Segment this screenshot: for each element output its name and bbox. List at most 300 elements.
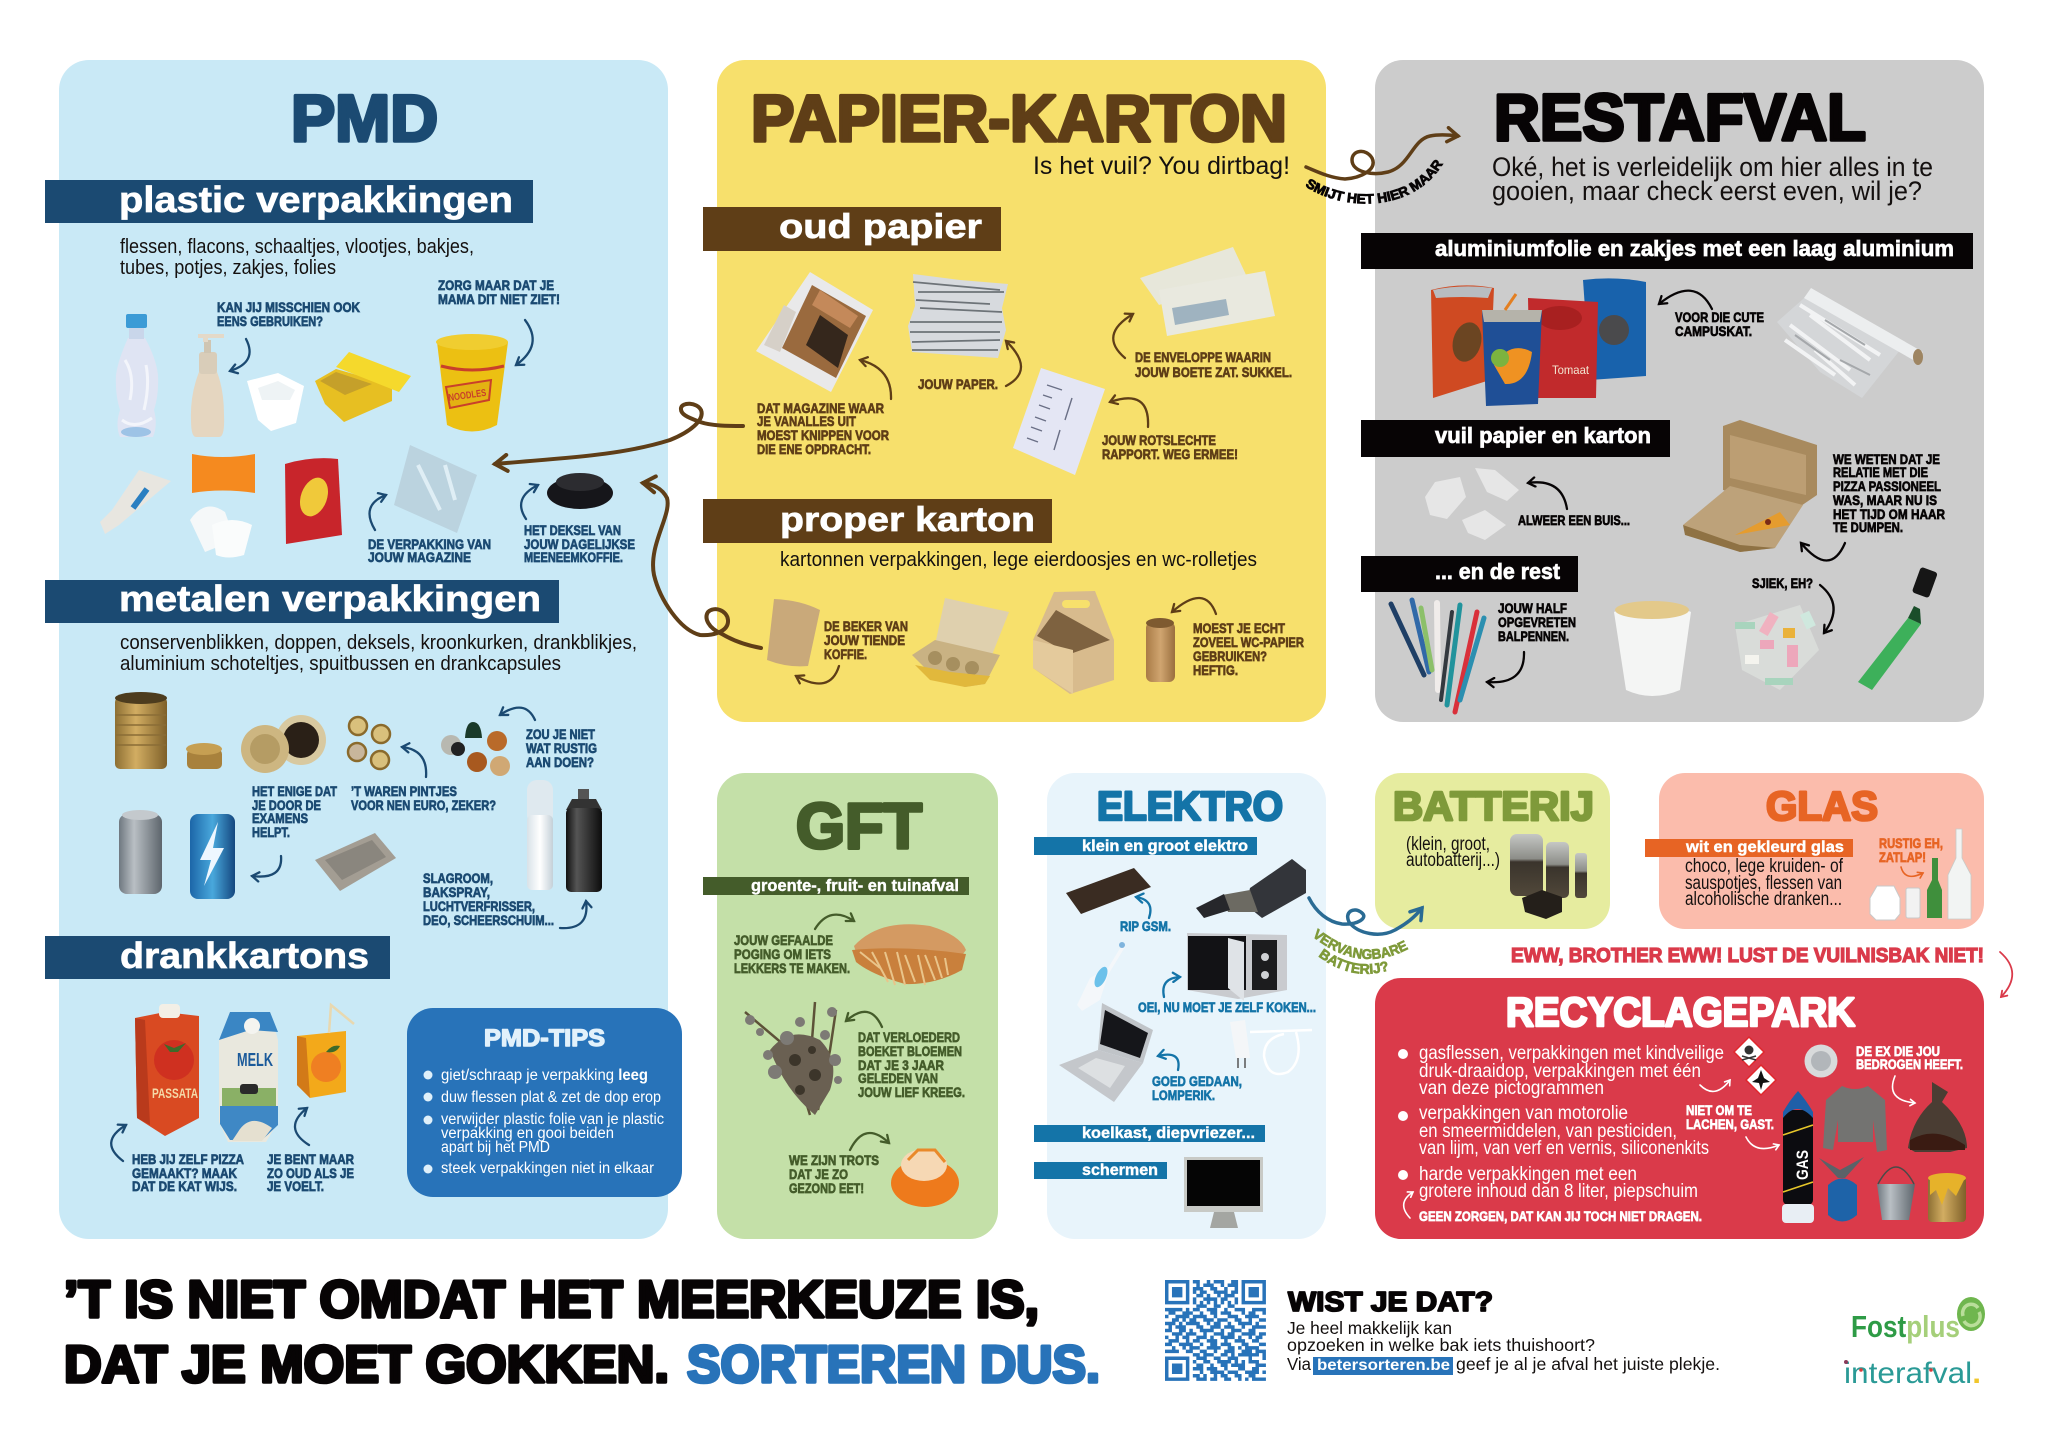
section bar: koelkast: koelkast, diepvriezer... (1082, 1125, 1255, 1142)
callout: we weten (1833, 451, 1945, 535)
section bar: plastic verpakkingen (45, 179, 533, 223)
callout: jouw gefaalde: LEKKERS TE MAKEN. (734, 960, 850, 976)
text: klein groot: autobatterij...) (1406, 850, 1500, 871)
arrow (1172, 598, 1216, 614)
arrow (500, 708, 535, 720)
callout: rustig eh (1879, 835, 1943, 865)
callout: kan jij misschien (217, 299, 360, 329)
icon: glass jar (1870, 886, 1900, 920)
callout: de ex (1856, 1043, 1963, 1072)
bullet list: tips: verpakking en gooi beiden (441, 1125, 614, 1142)
text: metal list: conservenblikken, doppen, deksels, kroonkurken, drankblikjes, (120, 632, 637, 654)
callout: kan jij misschien: KAN JIJ MISSCHIEN OOK (217, 299, 360, 315)
icon: charger and cable (1230, 1020, 1312, 1074)
icon: tangerine (891, 1149, 959, 1207)
arrow (1113, 314, 1133, 358)
callout: dat magazine: JE VANALLES UIT (757, 413, 856, 429)
callout: jouw half: BALPENNEN. (1498, 628, 1569, 644)
panel: restafval (1361, 60, 1984, 722)
callout: het deksel: MEENEEMKOFFIE. (524, 549, 623, 565)
callout: t waren pintjes (351, 783, 496, 813)
callout: slagroom: LUCHTVERFRISSER, (423, 898, 535, 914)
icon: smoke detector (1804, 1044, 1838, 1078)
icon: soup pouch (1528, 298, 1598, 398)
panel: recyclagepark (1375, 978, 1984, 1239)
heading: BATTERIJ: BATTERIJ (1393, 783, 1594, 829)
icon: coffee pouch (1431, 285, 1494, 398)
text: oke (1492, 152, 1933, 206)
callout: rustig eh: RUSTIG EH, (1879, 835, 1943, 851)
icon: aluminium tray (315, 833, 396, 891)
callout: moest je echt: ZOVEEL WC-PAPIER (1193, 634, 1304, 650)
heading: GFT: GFT (796, 790, 922, 862)
text: klein groot (1406, 834, 1500, 871)
arrow (846, 1012, 882, 1027)
icon: silver can (119, 810, 162, 894)
text: kartonnen: kartonnen verpakkingen, lege eierdoosjes en wc-rolletjes (780, 549, 1257, 571)
curved label: vervangbare batterij (1314, 928, 1408, 974)
heading: GLAS: GLAS (1766, 783, 1878, 829)
icon: pens (1391, 600, 1484, 712)
callout: sjiek: SJIEK, EH? (1752, 575, 1813, 591)
icon: chewing gum (1735, 605, 1819, 690)
callout: het enige dat: HELPT. (252, 824, 290, 840)
bullet list: recyclage: druk-draaidop, verpakkingen met één (1419, 1061, 1701, 1082)
slogan: ’T IS NIET OMDAT HET MEERKEUZE IS, (64, 1271, 1039, 1329)
text: plastic list: flessen, flacons, schaaltjes, vlootjes, bakjes, (120, 236, 474, 258)
section bar: drankkartons (45, 935, 390, 979)
panel: papier-karton (703, 60, 1326, 722)
icon: paint can (1928, 1173, 1966, 1222)
heading: RESTAFVAL: RESTAFVAL (1494, 80, 1866, 154)
section bar: proper karton (703, 499, 1052, 543)
heading: PMD-TIPS: PMD-TIPS (484, 1025, 605, 1052)
icon: sweater (1823, 1086, 1887, 1152)
icon: pump bottle (191, 334, 224, 437)
arrow (370, 495, 386, 530)
callout: dat verloederd: JOUW LIEF KREEG. (858, 1084, 965, 1100)
icon: cat food pouch (1583, 278, 1646, 380)
arrow (1801, 543, 1845, 560)
text: glass list: alcoholische dranken... (1685, 889, 1842, 910)
callout: moest je echt: MOEST JE ECHT (1193, 620, 1285, 636)
arrow: elektro to batterij (1309, 898, 1422, 934)
icon: sandwich (852, 924, 966, 985)
callout: niet om te lachen (1686, 1102, 1774, 1132)
callout: we weten: HET TIJD OM HAAR (1833, 506, 1945, 522)
section bar: klein en groot: klein en groot elektro (1082, 838, 1248, 855)
callout: kan jij misschien: EENS GEBRUIKEN? (217, 313, 323, 329)
QR code (1165, 1282, 1266, 1379)
callout: jouw paper: JOUW PAPER. (918, 376, 998, 392)
callout: jouw gefaalde: POGING OM IETS (734, 946, 831, 962)
headline: eww brother: EWW, BROTHER EWW! LUST DE VUILNISBAK NIET! (1511, 945, 1984, 967)
text: glass list: sauspotjes, flessen van (1685, 873, 1842, 894)
callout: de enveloppe: JOUW BOETE ZAT. SUKKEL. (1135, 364, 1292, 380)
arrow (1006, 341, 1021, 386)
callout: heb jij zelf pizza: HEB JIJ ZELF PIZZA (132, 1151, 244, 1167)
bullet list: tips: steek verpakkingen niet in elkaar (441, 1160, 654, 1177)
icon: chips bag (285, 458, 342, 544)
icon: electric toothbrush (1077, 942, 1125, 1011)
callout: jouw gefaalde (734, 932, 850, 976)
icon: bottle carrier (1033, 591, 1114, 694)
callout: jouw rotslechte: RAPPORT. WEG ERMEE! (1102, 446, 1238, 462)
icon: black spray (566, 789, 602, 892)
callout: zorg maar (438, 277, 560, 307)
callout: het enige dat: EXAMENS (252, 810, 308, 826)
icon: orange wrapper (192, 454, 255, 493)
icon: soup pouch: Tomaat (1552, 363, 1590, 377)
heading: PAPIER-KARTON: PAPIER-KARTON (751, 81, 1287, 155)
text: is het vuil: Is het vuil? You dirtbag! (1033, 152, 1290, 180)
section bar: plastic verpakkingen: plastic verpakkingen (119, 179, 513, 220)
bullet list: recyclage: van deze pictogrammen (1419, 1078, 1604, 1099)
bullet list: recyclage: verpakkingen van motorolie (1419, 1103, 1628, 1124)
callout: zou je niet: ZOU JE NIET (526, 726, 595, 742)
callout: goed gedaan: LOMPERIK. (1152, 1087, 1215, 1103)
icon: vape (1196, 859, 1306, 918)
text block: wist je dat: geef je al je afval het juiste plekje. (1456, 1354, 1720, 1374)
icon: trash bag (1908, 1082, 1967, 1152)
slogan: SORTEREN DUS. (687, 1336, 1100, 1394)
callout: het deksel: HET DEKSEL VAN (524, 522, 621, 538)
callout: slagroom: DEO, SCHEERSCHUIM... (423, 912, 554, 928)
arrow (1746, 1137, 1779, 1149)
callout: we weten: PIZZA PASSIONEEL (1833, 478, 1941, 494)
heading: ELEKTRO: ELEKTRO (1097, 783, 1283, 829)
section bar: vuil papier: vuil papier en karton (1435, 423, 1651, 448)
heading: wist je dat: WIST JE DAT? (1288, 1286, 1493, 1317)
text: metal list: aluminium schoteltjes, spuitbussen en drankcapsules (120, 653, 561, 675)
icon: plastic film (394, 445, 477, 533)
callout: zou je niet (526, 726, 597, 770)
callout: dat verloederd: BOEKET BLOEMEN (858, 1043, 962, 1059)
text block: wist je dat (1287, 1318, 1720, 1375)
arrow (2000, 952, 2012, 997)
icon: energy drink can (190, 814, 235, 899)
callout: je bent maar (267, 1151, 354, 1194)
arrow (860, 360, 891, 399)
section bar: en de rest (1361, 556, 1578, 592)
section bar: aluminiumfolie: aluminiumfolie en zakjes met een laag aluminium (1435, 236, 1954, 261)
slogan: DAT JE MOET GOKKEN. (64, 1336, 669, 1394)
icon: monitor (1184, 1157, 1263, 1228)
panel: PMD (45, 60, 682, 1239)
callout: je bent maar: ZO OUD ALS JE (267, 1165, 354, 1181)
section bar: wit en gekleurd glas (1645, 839, 1853, 857)
callout: dat magazine (757, 400, 889, 457)
text: metal list (120, 632, 637, 675)
icon: batteries (1510, 834, 1587, 919)
icon: butter tub (315, 352, 411, 422)
callout: jouw half (1498, 600, 1576, 644)
icon: dried flowers (745, 1002, 842, 1115)
callout: rustig eh: ZATLAP! (1879, 849, 1926, 865)
icon: juice carton (297, 1005, 354, 1098)
icon: broken laptop (1059, 1003, 1153, 1102)
callout: t waren pintjes: ’T WAREN PINTJES (351, 783, 457, 799)
section bar: en de rest: ... en de rest (1435, 559, 1561, 584)
icon: report card (1013, 368, 1105, 475)
callout: het deksel (524, 522, 635, 565)
icon: noodle cup (436, 334, 508, 432)
section bar: schermen: schermen (1082, 1162, 1158, 1179)
callout: moest je echt (1193, 620, 1304, 678)
arrow: papier to restafval (1306, 135, 1458, 179)
panel: glas (1645, 773, 1984, 929)
callout: de beker (824, 618, 908, 662)
icon: green marker (1858, 567, 1938, 690)
icon: white cups (190, 507, 252, 558)
section bar: klein en groot (1034, 837, 1257, 855)
curved label: vervangbare batterij: BATTERIJ? (1318, 948, 1388, 974)
arrow: papier to PMD upper (495, 404, 743, 464)
bullet list: tips: verwijder plastic folie van je plastic (441, 1111, 664, 1128)
text: oke: Oké, het is verleidelijk om hier alles in te (1492, 152, 1933, 182)
callout: de verpakking (368, 536, 491, 565)
text: plastic list: tubes, potjes, zakjes, folies (120, 257, 336, 279)
arrow (1528, 482, 1567, 509)
callout: zorg maar: MAMA DIT NIET ZIET! (438, 291, 560, 307)
callout: slagroom (423, 870, 554, 928)
curved label: vervangbare batterij: VERVANGBARE (1314, 928, 1408, 960)
callout: we weten: RELATIE MET DIE (1833, 464, 1928, 480)
section bar: wit en gekleurd glas: wit en gekleurd glas (1685, 839, 1844, 856)
callout: jouw half: JOUW HALF (1498, 600, 1567, 616)
arrow (111, 1125, 126, 1161)
callout: we weten: WAS, MAAR NU IS (1833, 492, 1937, 508)
icon: bucket (1877, 1167, 1915, 1220)
callout: je bent maar: JE BENT MAAR (267, 1151, 354, 1167)
callout: jouw rotslechte (1102, 432, 1238, 462)
bullet list: recyclage: van lijm, van verf en vernis, siliconenkits (1419, 1138, 1709, 1159)
icon: food can (115, 692, 167, 769)
icon: microwave (1187, 933, 1287, 1001)
callout: heb jij zelf pizza (132, 1151, 244, 1194)
callout: zorg maar: ZORG MAAR DAT JE (438, 277, 554, 293)
arrow (1487, 652, 1524, 682)
callout: het enige dat: HET ENIGE DAT (252, 783, 337, 799)
arrow (1901, 867, 1923, 876)
icon: bottle caps (348, 717, 390, 769)
arrow (252, 856, 281, 877)
section bar: oud papier (703, 207, 1001, 251)
callout: oei: OEI, NU MOET JE ZELF KOKEN... (1138, 999, 1316, 1015)
section bar: proper karton: proper karton (780, 501, 1035, 539)
bullet list: recyclage: en smeermiddelen, van pesticiden, (1419, 1121, 1677, 1142)
arrow (1163, 977, 1180, 997)
icon: juice pouch (1482, 294, 1542, 406)
icon: paper cup (767, 599, 820, 666)
icon: broken phone (1066, 868, 1151, 914)
arrow (1136, 897, 1150, 918)
arrow (295, 1108, 309, 1145)
callout: je bent maar: JE VOELT. (267, 1178, 324, 1194)
callout: jouw gefaalde: JOUW GEFAALDE (734, 932, 833, 948)
callout: jouw half: OPGEVRETEN (1498, 614, 1576, 630)
callout: zou je niet: AAN DOEN? (526, 754, 594, 770)
section bar: vuil papier (1361, 420, 1670, 457)
callout: we zijn trots: GEZOND EET! (789, 1180, 864, 1196)
bullet list: recyclage (1398, 1043, 1724, 1202)
icon: aluminium foil (1777, 288, 1923, 398)
heading: PMD: PMD (291, 81, 438, 155)
callout: we zijn trots (789, 1152, 879, 1196)
callout: we zijn trots: WE ZIJN TROTS (789, 1152, 879, 1168)
arrow (815, 915, 854, 929)
callout: moest je echt: HEFTIG. (1193, 662, 1238, 678)
callout: de verpakking: DE VERPAKKING VAN (368, 536, 491, 552)
callout: het enige dat (252, 783, 337, 840)
bullet list: recyclage: gasflessen, verpakkingen met kindveilige (1419, 1043, 1724, 1064)
icon: yoghurt cup (247, 373, 304, 431)
arrow (1820, 585, 1834, 633)
callout: rip gsm: RIP GSM. (1120, 918, 1171, 934)
bullet list: recyclage: harde verpakkingen met een (1419, 1164, 1637, 1185)
arrow (560, 901, 586, 928)
callout: zou je niet: WAT RUSTIG (526, 740, 597, 756)
callout: de beker: KOFFIE. (824, 646, 867, 662)
callout: de beker: JOUW TIENDE (824, 632, 905, 648)
icon: toilet roll (1146, 618, 1175, 682)
icon: clear bottle (1948, 829, 1971, 919)
callout: de ex: DE EX DIE JOU (1856, 1043, 1940, 1059)
icon: water bottle (116, 314, 158, 437)
section bar: metalen verpakkingen (45, 578, 559, 623)
bullet list: recyclage: grotere inhoud dan 8 liter, piepschuim (1419, 1181, 1698, 1202)
icon: small jar (1906, 888, 1920, 918)
arrow (1404, 1192, 1413, 1218)
callout: dat verloederd: DAT VERLOEDERD (858, 1029, 960, 1045)
icon: milk carton: MELK (237, 1050, 273, 1070)
callout: alweer een buis: ALWEER EEN BUIS... (1518, 512, 1630, 528)
callout: slagroom: BAKSPRAY, (423, 884, 490, 900)
text: glass list: choco, lege kruiden- of (1685, 856, 1844, 877)
callout: heb jij zelf pizza: GEMAAKT? MAAK (132, 1165, 237, 1181)
arrow (1659, 291, 1712, 309)
callout: jouw rotslechte: JOUW ROTSLECHTE (1102, 432, 1216, 448)
icon: magazine (756, 272, 873, 392)
callout: het enige dat: JE DOOR DE (252, 797, 321, 813)
icon: coffee lid (547, 473, 613, 509)
logo: Fostplus: Fostplus (1851, 1309, 1960, 1344)
bullet list: tips: giet/schraap je verpakking leeg (441, 1067, 648, 1084)
callout: dat verloederd: DAT JE 3 JAAR (858, 1057, 944, 1073)
callout: het deksel: JOUW DAGELIJKSE (524, 536, 635, 552)
panel: elektro (1034, 773, 1326, 1239)
callout: we zijn trots: DAT JE ZO (789, 1166, 848, 1182)
callout: heb jij zelf pizza: DAT DE KAT WIJS. (132, 1178, 237, 1194)
section bar: aluminiumfolie (1361, 233, 1973, 269)
arrow (230, 339, 250, 371)
arrow (1892, 1076, 1915, 1103)
callout: we weten: WE WETEN DAT JE (1833, 451, 1940, 467)
text block: wist je dat: opzoeken in welke bak iets thuishoort? (1287, 1335, 1595, 1355)
bullet list: tips (424, 1067, 664, 1177)
callout: dat magazine: DAT MAGAZINE WAAR (757, 400, 884, 416)
icon: passata carton: PASSATA (152, 1085, 198, 1101)
arrow: papier to PMD lower (643, 483, 761, 648)
callout: goed gedaan: GOED GEDAAN, (1152, 1073, 1242, 1089)
arrow (796, 666, 839, 684)
callout: de beker: DE BEKER VAN (824, 618, 908, 634)
callout: niet om te lachen: LACHEN, GAST. (1686, 1116, 1774, 1132)
callout: geen zorgen: GEEN ZORGEN, DAT KAN JIJ TOCH NIET DRAGEN. (1419, 1208, 1702, 1224)
panel: batterij (1375, 773, 1610, 929)
logo: Fostplus (1851, 1297, 1985, 1344)
callout: moest je echt: GEBRUIKEN? (1193, 648, 1267, 664)
icon: hazard pictogram skull (1734, 1037, 1764, 1067)
heading: RECYCLAGEPARK: RECYCLAGEPARK (1506, 989, 1855, 1035)
callout: voor die cute: CAMPUSKAT. (1675, 323, 1752, 339)
icon: noodle cup: NOODLES (448, 388, 487, 404)
icon: stack of caps (186, 743, 222, 769)
icon: newspapers (908, 274, 1008, 358)
icon: hazard pictogram health (1746, 1065, 1776, 1095)
slogan (64, 1271, 1100, 1394)
callout: de ex: BEDROGEN HEEFT. (1856, 1056, 1963, 1072)
callout: voor die cute (1675, 309, 1764, 339)
callout: we weten: TE DUMPEN. (1833, 519, 1903, 535)
section bar: schermen (1034, 1162, 1167, 1179)
arrow (1158, 1055, 1179, 1070)
curved label: smijt het hier maar: SMIJT HET HIER MAAR (1306, 160, 1444, 204)
arrow (402, 747, 426, 777)
panel: PMD tips (407, 1008, 682, 1197)
arrow (1700, 1080, 1730, 1091)
section bar: metalen verpakkingen: metalen verpakkingen (119, 578, 541, 619)
section bar: oud papier: oud papier (779, 208, 982, 246)
arrow (1110, 398, 1148, 427)
icon: passata carton (135, 1004, 199, 1136)
icon: green bottle (1927, 858, 1942, 918)
icon: crumpled paper (1425, 468, 1519, 540)
callout: de enveloppe (1135, 349, 1292, 380)
icon: jar lids (241, 715, 326, 773)
callout: dat verloederd (858, 1029, 965, 1100)
callout: de verpakking: JOUW MAGAZINE (368, 549, 471, 565)
icon: camping stove (1819, 1157, 1864, 1222)
icon: gas bottle: GAS (1793, 1150, 1812, 1180)
arrow (521, 485, 538, 519)
panel: GFT (703, 773, 998, 1239)
callout: dat magazine: MOEST KNIPPEN VOOR (757, 427, 889, 443)
icon: egg carton (912, 598, 1009, 687)
text: glass list (1685, 856, 1844, 910)
callout: dat magazine: DIE ENE OPDRACHT. (757, 441, 871, 457)
icon: envelopes (1140, 247, 1275, 336)
text block: wist je dat: Je heel makkelijk kan (1287, 1318, 1452, 1338)
text block: wist je dat: Via (1287, 1354, 1311, 1374)
icon: coffee capsules (441, 722, 510, 776)
callout: niet om te lachen: NIET OM TE (1686, 1102, 1752, 1118)
icon: toothpaste tube (100, 470, 171, 534)
bullet list: tips: apart bij het PMD (441, 1139, 550, 1156)
callout: dat verloederd: GELEDEN VAN (858, 1070, 938, 1086)
callout: t waren pintjes: VOOR NEN EURO, ZEKER? (351, 797, 496, 813)
text block: wist je dat: betersorteren.be (1317, 1357, 1450, 1374)
text: oke: gooien, maar check eerst even, wil je? (1492, 176, 1922, 206)
bullet list: tips: duw flessen plat & zet de dop erop (441, 1089, 661, 1106)
section bar: drankkartons: drankkartons (120, 935, 369, 976)
text: plastic list (120, 236, 474, 279)
icon: pizza box (1683, 420, 1817, 552)
callout: de enveloppe: DE ENVELOPPE WAARIN (1135, 349, 1271, 365)
callout: voor die cute: VOOR DIE CUTE (1675, 309, 1764, 325)
callout: goed gedaan (1152, 1073, 1242, 1103)
logo: interafval: interafval. (1844, 1357, 1981, 1390)
